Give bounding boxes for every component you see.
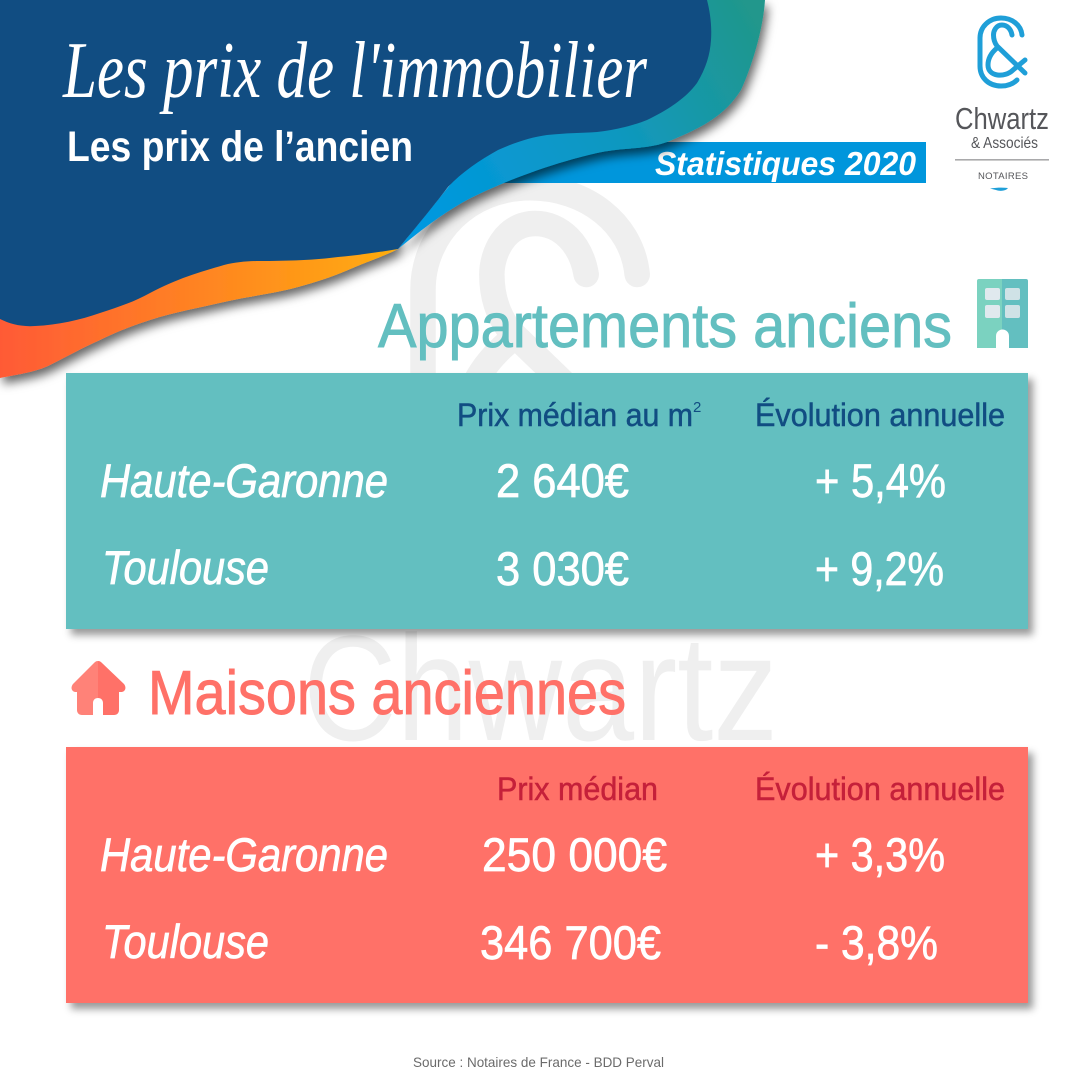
source note: Source : Notaires de France - BDD Perval: [413, 1054, 664, 1070]
title: Les prix de l'immobilier: [62, 27, 648, 115]
logo name: Chwartz: [955, 101, 1049, 136]
value: evolution: - 3,8%: [815, 916, 938, 969]
teal-blue wave: [398, 0, 765, 249]
icon: house: [72, 661, 125, 715]
heading: Appartements anciens: Appartements anciens: [378, 292, 952, 361]
logo notaires: NOTAIRES: [978, 171, 1028, 182]
row label: Toulouse: Toulouse: [102, 541, 269, 594]
navy blob: [0, 0, 711, 326]
panel: appartements table: [66, 373, 1028, 629]
column header: prix median au m2: Prix médian au m: [457, 397, 693, 433]
logo associates: & Associés: [971, 135, 1038, 152]
value: evolution: + 9,2%: [815, 542, 944, 595]
column header: evolution: Évolution annuelle: [755, 771, 1005, 807]
watermark: Chwartz: Chwartz: [303, 604, 778, 772]
logo: [955, 18, 1049, 191]
orange wave: [0, 230, 398, 378]
value: evolution: + 3,3%: [815, 828, 945, 881]
column header: evolution: Évolution annuelle: [755, 397, 1005, 433]
banner label: Statistiques 2020: [655, 145, 917, 182]
column header: prix median: Prix médian: [497, 771, 658, 807]
value: price: 346 700€: [480, 916, 661, 969]
icon: ampersand logo: [980, 18, 1025, 86]
heading: Maisons anciennes: Maisons anciennes: [148, 659, 626, 728]
logo swoosh: [990, 188, 1008, 191]
header wave shape: [0, 0, 765, 378]
value: evolution: + 5,4%: [815, 454, 946, 507]
icon: apartment building: [977, 279, 1028, 348]
row label: Haute-Garonne: Haute-Garonne: [100, 454, 388, 507]
statistics banner: [500, 142, 926, 183]
panel: maisons table: [66, 747, 1028, 1003]
row label: Toulouse: Toulouse: [102, 915, 269, 968]
row label: Haute-Garonne: Haute-Garonne: [100, 828, 388, 881]
value: price: 2 640€: [496, 454, 629, 507]
value: price: 3 030€: [496, 542, 629, 595]
superscript 2: 2: [693, 399, 701, 416]
watermark: ampersand logo: [423, 188, 652, 535]
subtitle: Les prix de l’ancien: [67, 123, 413, 171]
value: price: 250 000€: [482, 828, 667, 881]
